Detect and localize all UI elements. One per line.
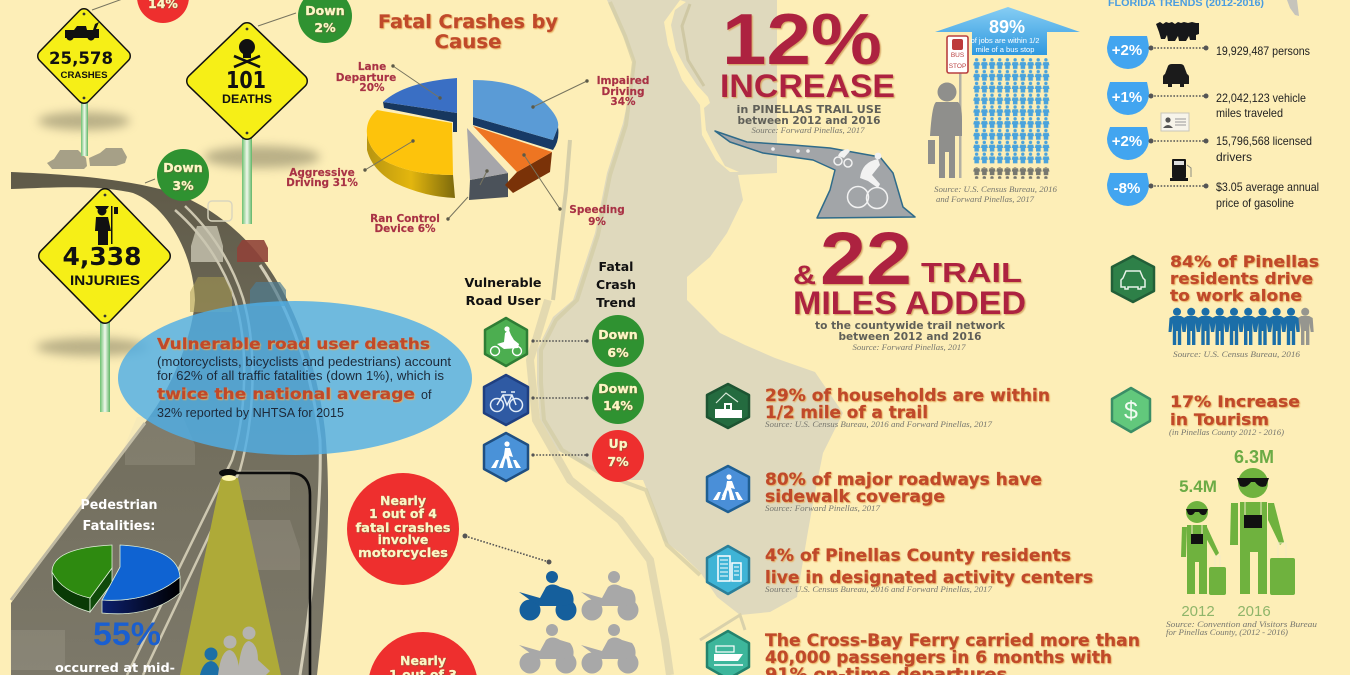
icon: injured person with IV drip — [95, 206, 118, 245]
chart: 89% of jobs near bus stop: and Forward Pinellas, 2017 — [936, 194, 1035, 204]
stat: households near trail: 29% of households are within — [765, 386, 1050, 405]
stat: drive to work alone: to work alone — [1170, 286, 1302, 305]
badge: pedestrians up 7%: Up — [608, 436, 628, 451]
pie labels: 20% — [359, 82, 385, 94]
pie labels: 9% — [588, 216, 606, 228]
stat: 12% increase in trail use: Source: Forward Pinellas, 2017 — [752, 125, 865, 135]
row: gasoline — [1107, 159, 1319, 210]
row: gasoline: $3.05 average annual — [1216, 180, 1319, 194]
row: vehicle miles: +1% — [1112, 89, 1142, 106]
badge: deaths down 2%: 2% — [314, 20, 336, 35]
stat: 22 trail miles added: MILES ADDED — [793, 285, 1026, 321]
stat: 22 trail miles added: to the countywide trail network — [815, 319, 1006, 332]
chart: 89% of jobs near bus stop: mile of a bus stop — [976, 45, 1034, 54]
chart: tourists 2012 vs 2016 — [1166, 447, 1317, 637]
tourist 2016 — [1230, 468, 1295, 595]
panel: vulnerable road user callout: twice the national average — [157, 385, 415, 403]
bus stop sign — [947, 36, 968, 178]
pie labels: Device 6% — [374, 223, 436, 235]
stat: 12% increase in trail use: INCREASE — [720, 68, 895, 104]
heading: fatal crash trend — [596, 259, 636, 310]
pie labels: Speeding — [569, 204, 625, 216]
stat: households near trail: 1/2 mile of a trail — [765, 403, 928, 422]
badge: motorcycles down 6%: 6% — [607, 345, 629, 360]
bus stop sign: BUS — [951, 52, 965, 59]
stat: 22 trail miles added: Source: Forward Pinellas, 2017 — [852, 342, 966, 352]
stat: drive to work alone — [1112, 252, 1319, 359]
panel: Florida trends — [1107, 0, 1319, 210]
stat: households near trail: Source: U.S. Census Bureau, 2016 and Forward Pinellas, 2017 — [765, 419, 993, 429]
road — [10, 172, 328, 675]
badge: deaths down 2% — [298, 0, 352, 43]
slice: impaired driving — [473, 80, 558, 150]
badge: bicycles down 14%: 14% — [603, 398, 633, 413]
pictogram of people — [973, 58, 1050, 164]
icon: car hexagon — [1112, 256, 1154, 302]
icon: ferry hexagon — [707, 631, 749, 675]
row: population — [1107, 22, 1310, 69]
callout: nearly 1 out of 3 — [368, 632, 478, 675]
heading: fatal crashes by cause: Cause — [434, 31, 502, 53]
arrow banner — [935, 7, 1080, 55]
stat: sidewalk coverage: Source: Forward Pinellas, 2017 — [765, 503, 881, 513]
pie labels: Aggressive — [289, 167, 355, 179]
sign: crashes: CRASHES — [60, 70, 108, 81]
crashed cars — [47, 148, 127, 169]
badge: pedestrians up 7% — [592, 430, 644, 482]
connectors to trend badges — [531, 339, 589, 457]
tourist 2012 — [1181, 501, 1226, 595]
icon: skull and crossbones — [234, 39, 260, 67]
callout: motorcycles 1 of 4: Nearly — [380, 493, 426, 508]
icon: dollar hexagon: $ — [1124, 397, 1138, 425]
icon: bicycle hexagon — [484, 375, 528, 425]
panel: vulnerable road user callout: 32% reported by NHTSA for 2015 — [157, 406, 344, 420]
badge: injuries down 3% — [157, 149, 209, 201]
badge: bicycles down 14%: Down — [598, 381, 638, 396]
icon: ID card — [1161, 113, 1189, 131]
death count: 101 — [226, 68, 266, 94]
faint cars on road — [10, 417, 300, 670]
row: licensed drivers: +2% — [1112, 133, 1142, 150]
row: population: +2% — [1112, 42, 1142, 59]
trail illustration with cyclists — [715, 131, 915, 218]
post — [81, 100, 88, 156]
sign: deaths — [194, 28, 300, 224]
year labels: 2012 — [1181, 603, 1215, 620]
heading: fatal crash trend: Trend — [596, 295, 636, 310]
badge: injuries down 3%: 3% — [172, 178, 194, 193]
stat: activity centers: live in designated activity centers — [765, 568, 1093, 587]
icon: tow truck — [65, 22, 99, 38]
icon: motorcycle grid, 1 of 4 highlighted — [519, 571, 638, 674]
icon: gas pump — [1170, 159, 1191, 181]
sign: injuries — [46, 194, 163, 412]
stat: 22 trail miles added: & — [793, 260, 816, 290]
callout: motorcycles 1 of 4: involve — [378, 532, 428, 547]
row: licensed drivers: drivers — [1216, 150, 1252, 164]
heading: fatal crash trend: Crash — [596, 277, 636, 292]
heading: vulnerable road user: Road User — [466, 293, 541, 308]
stat: 12% increase in trail use: between 2012 and 2016 — [738, 114, 881, 127]
stat: cross-bay ferry: 40,000 passengers in 6 months with — [765, 648, 1112, 667]
chart: 89% of jobs near bus stop: of jobs are within 1/2 — [971, 36, 1039, 45]
icon: home hexagon — [707, 384, 749, 428]
stat: sidewalk coverage — [707, 466, 1042, 513]
pie labels: Lane — [358, 61, 386, 73]
pie labels — [286, 61, 649, 235]
icon: dollar hexagon — [1112, 388, 1150, 432]
badge: crashes up 14% — [137, 0, 189, 23]
stat: increase in tourism: in Tourism — [1170, 410, 1269, 429]
stat: drive to work alone: residents drive — [1170, 269, 1313, 288]
callout: motorcycles 1 of 4: motorcycles — [358, 545, 448, 560]
stat: increase in tourism: (in Pinellas County 2012 - 2016) — [1169, 427, 1284, 437]
heading: fatal crashes by cause — [378, 11, 559, 53]
slice: ran control device — [467, 128, 508, 200]
post — [100, 318, 110, 412]
panel: vulnerable road user callout — [118, 301, 472, 455]
pie labels: Departure — [336, 72, 396, 84]
panel: vulnerable road user callout: for 62% of all traffic fatalities (down 1%), which is — [157, 369, 444, 383]
row: licensed drivers: 15,796,568 licensed — [1216, 134, 1312, 148]
row: population: 19,929,487 persons — [1216, 44, 1310, 58]
callout body: (motorcyclists, bicyclists and pedestrians) account — [157, 355, 452, 369]
row: gasoline: -8% — [1114, 180, 1140, 197]
stat: activity centers: 4% of Pinellas County residents — [765, 546, 1071, 565]
bus stop sign: STOP — [949, 63, 966, 70]
map of Pinellas County and Tampa Bay — [530, 0, 843, 675]
row: vehicle miles: 22,042,123 vehicle — [1216, 91, 1306, 105]
stat: cross-bay ferry — [707, 631, 1140, 675]
pie labels: 34% — [610, 96, 636, 108]
stat: increase in tourism: 17% Increase — [1170, 392, 1300, 411]
stat: 22 trail miles added: 22 — [820, 217, 912, 300]
value labels: 6.3M — [1234, 447, 1274, 467]
stat: 22 trail miles added — [793, 217, 1026, 352]
stat: increase in tourism — [1112, 388, 1300, 437]
heading: fatal crashes by cause: Fatal Crashes by — [378, 11, 559, 33]
stat: 22 trail miles added: TRAIL — [921, 257, 1022, 288]
pictogram: 10 commuters — [1168, 308, 1314, 345]
badge: pedestrians up 7%: 7% — [607, 454, 629, 469]
source: Source: Convention and Visitors Bureau — [1166, 619, 1317, 629]
heading: fatal crash trend: Fatal — [599, 259, 633, 274]
street light — [180, 469, 310, 675]
chart: tourists 2012 vs 2016: 2016 — [1237, 603, 1271, 620]
callout heading: Vulnerable road user deaths — [157, 335, 430, 353]
icon: pedestrian crossing hexagon — [484, 433, 528, 481]
panel: vulnerable road user callout: of — [421, 388, 432, 402]
callout: motorcycles 1 of 4: 1 out of 4 — [369, 506, 437, 521]
source: Source: U.S. Census Bureau, 2016 — [934, 184, 1058, 194]
chart: 89% of jobs near bus stop — [928, 7, 1080, 204]
pie chart: mid-block share — [52, 545, 180, 614]
stat: 12% increase in trail use: in PINELLAS TRAIL USE — [736, 103, 882, 116]
icon: Florida outline — [1287, 0, 1299, 16]
post — [242, 135, 252, 224]
woman waiting — [928, 82, 962, 178]
stat: activity centers: Source: U.S. Census Bureau, 2016 and Forward Pinellas, 2017 — [765, 584, 993, 594]
stat: 12% increase in trail use — [720, 0, 895, 135]
connector to motorcycles — [462, 534, 552, 564]
stat: households near trail — [707, 384, 1050, 429]
icon: crowd — [1156, 22, 1199, 41]
stat: drive to work alone: 84% of Pinellas — [1170, 252, 1319, 271]
chart: tourists 2012 vs 2016: for Pinellas County, (2012 - 2016) — [1166, 627, 1288, 637]
row: gasoline: price of gasoline — [1216, 196, 1294, 210]
stat: sidewalk coverage: 80% of major roadways have — [765, 470, 1042, 489]
stat: 12% increase in trail use: 12% — [722, 0, 882, 80]
heading: Pedestrian — [80, 498, 158, 513]
pie labels: Ran Control — [370, 213, 440, 225]
badge: bicycles down 14% — [592, 372, 644, 424]
panel: pedestrian fatalities — [52, 498, 180, 675]
row: vehicle miles: miles traveled — [1216, 106, 1283, 120]
slice: aggressive driving — [367, 110, 455, 198]
sign: injuries: INJURIES — [70, 272, 140, 288]
row: licensed drivers — [1107, 113, 1312, 164]
stat: cross-bay ferry: The Cross-Bay Ferry carried more than — [765, 631, 1140, 650]
heading: vulnerable road user — [464, 275, 542, 308]
slice: lane departure — [383, 78, 457, 132]
stat: sidewalk coverage: sidewalk coverage — [765, 487, 945, 506]
pedestrians under the light — [200, 626, 270, 675]
55 percent figure: 55% — [93, 616, 161, 652]
panel: pedestrian fatalities: Fatalities: — [82, 519, 156, 534]
caption: occurred at mid- — [55, 660, 175, 675]
badge: motorcycles down 6% — [592, 315, 644, 367]
stat: 22 trail miles added: between 2012 and 2016 — [838, 330, 982, 343]
callout: motorcycles 1 of 4: fatal crashes — [356, 520, 450, 535]
pie labels: Driving — [602, 86, 644, 98]
sign shadows — [36, 112, 320, 356]
sign: deaths: DEATHS — [222, 92, 272, 106]
icon: buildings hexagon — [707, 546, 749, 594]
callout: nearly 1 out of 3: Nearly — [400, 653, 446, 668]
sign: crashes — [44, 13, 124, 156]
leader from signs to badges — [92, 0, 296, 183]
callout: motorcycles 1 of 4 — [347, 473, 459, 585]
stat: drive to work alone: Source: U.S. Census Bureau, 2016 — [1173, 349, 1301, 359]
pie chart: fatal crashes by cause — [367, 78, 558, 200]
icon: car — [1163, 64, 1189, 87]
chart: tourists 2012 vs 2016: 5.4M — [1179, 477, 1217, 496]
cars on the curve — [190, 201, 286, 312]
badge: motorcycles down 6%: Down — [598, 327, 638, 342]
crash count: 25,578 — [49, 49, 113, 69]
injury count: 4,338 — [62, 242, 142, 271]
icon: motorcycle hexagon — [485, 318, 527, 366]
stat: activity centers — [707, 546, 1093, 594]
heading: vulnerable road user: Vulnerable — [464, 275, 542, 290]
badge: injuries down 3%: Down — [163, 160, 203, 175]
badge: deaths down 2%: Down — [305, 3, 345, 18]
slice: speeding — [473, 126, 552, 193]
pie labels: Driving 31% — [286, 177, 358, 189]
row: vehicle miles — [1107, 64, 1306, 120]
icon: pedestrian hexagon — [707, 466, 749, 512]
chart: 89% of jobs near bus stop: 89% — [989, 17, 1025, 37]
pie labels: Impaired — [597, 75, 649, 87]
